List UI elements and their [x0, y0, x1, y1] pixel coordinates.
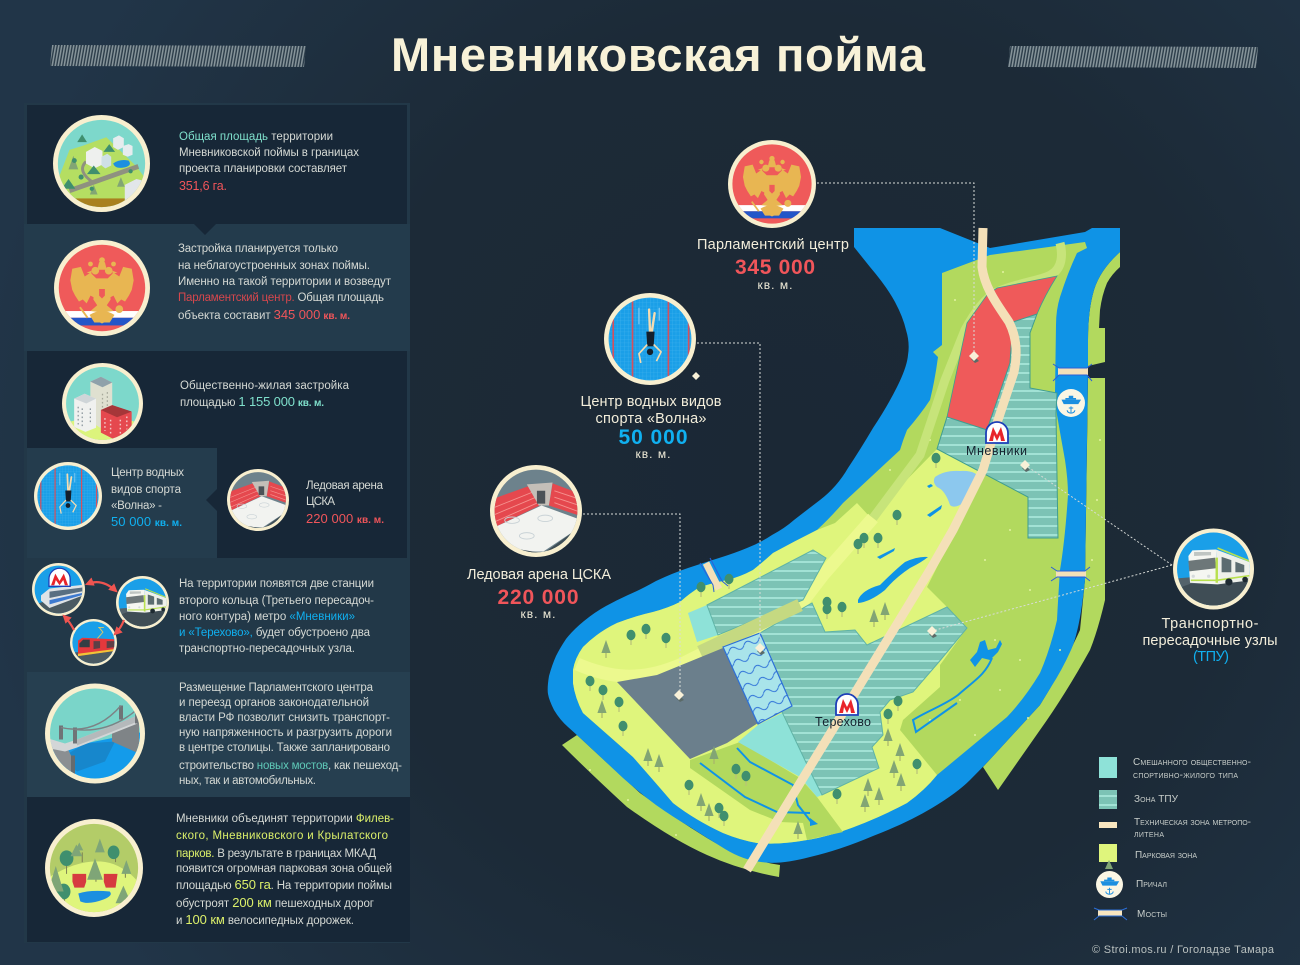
legend: pier	[1096, 871, 1167, 898]
callout: parliament center: 345 000	[735, 256, 815, 279]
east bank south strip	[983, 378, 1105, 790]
decorative hatch bar right	[1008, 46, 1258, 68]
callout: transport hubs	[1142, 528, 1278, 665]
panel: mixed-use development: Общественно-жилая застройка	[180, 380, 350, 392]
legend: bridges	[1094, 908, 1167, 920]
outer southwest bank	[562, 735, 780, 877]
panel: CSKA ice arena	[206, 448, 407, 558]
bridge south	[1051, 567, 1090, 581]
panel: total area: проекта планировки составляет	[179, 163, 348, 175]
panel: water sports center: «Волна» -	[111, 500, 162, 512]
callout: ice arena	[467, 465, 611, 621]
callout: water sports center: 50 000	[618, 426, 688, 449]
bridge north	[1053, 364, 1092, 381]
callout: water sports center: спорта «Волна»	[596, 411, 706, 427]
panel: parliament center: Застройка планируется только	[178, 243, 338, 255]
boulevard dark path	[873, 243, 1061, 518]
panel: parks: площадью 650 га. На территории поймы	[176, 877, 392, 892]
panel: parliament center: объекта составит 345 000 кв. м.	[178, 307, 350, 322]
callout: ice arena: Ледовая арена ЦСКА	[467, 567, 611, 583]
panel: mixed-use development	[27, 351, 407, 448]
panel: metro and transport hubs: и «Терехово», будет обустроено два	[179, 627, 371, 639]
panel: parks: обустроят 200 км пешеходных дорог	[176, 895, 374, 910]
panel: total area: Общая площадь территории	[179, 131, 333, 143]
panel: metro and transport hubs: транспортно-пересадочных узла.	[179, 643, 355, 655]
legend: TPU	[1099, 790, 1179, 809]
callout: parliament center: кв. м.	[758, 278, 792, 292]
leader lines	[583, 183, 1172, 695]
boulevard crossing TPU	[700, 605, 800, 652]
legend: TPU: Зона ТПУ	[1134, 794, 1179, 805]
light park zone	[573, 449, 985, 844]
panel: facts sidebar	[24, 103, 410, 943]
panel: metro and transport hubs	[32, 563, 374, 666]
panel: parliament center	[24, 224, 410, 351]
river	[548, 228, 1120, 863]
panel: new bridges: и переезд органов законодательной	[179, 697, 369, 709]
panel: parliament center: Парламентский центр. Общая площадь	[178, 292, 384, 304]
park tree-line dots	[589, 271, 1101, 836]
panel: metro and transport hubs: ного контура) метро «Мневники»	[179, 611, 355, 623]
TPU zone upper	[707, 550, 826, 635]
panel: water sports center: 50 000 кв. м.	[111, 514, 182, 529]
panel: parks: парков. В результате в границах МКАД	[176, 848, 376, 860]
legend: mixed-use	[1099, 757, 1251, 781]
bridge southwest	[700, 558, 728, 592]
darker park piece south	[690, 742, 843, 840]
zone: ice arena plot	[617, 648, 758, 759]
panel: parliament center: на неблагоустроенных зонах поймы.	[178, 260, 370, 272]
zone: water sports plot	[723, 633, 792, 724]
panel: water sports center: Центр водных	[111, 467, 184, 479]
callout: water sports center: кв. м.	[636, 447, 670, 461]
mixed-use zone upper	[688, 605, 718, 642]
callout: ice arena: 220 000	[498, 586, 578, 609]
panel: parks: появится огромная парковая зона общей	[176, 863, 392, 875]
decorative hatch bar left	[50, 45, 306, 67]
leader markers	[674, 351, 1030, 702]
legend: park: Парковая зона	[1135, 850, 1197, 861]
panel: total area: Мневниковской поймы в границах	[179, 147, 359, 159]
callout: transport hubs: Транспортно-	[1162, 616, 1259, 632]
metro station Terekhovo: Терехово	[815, 715, 871, 729]
trees	[586, 453, 940, 839]
panel: new bridges: ную напряженность и разгрузить дороги	[179, 727, 392, 739]
callout: water sports center: Центр водных видов	[580, 394, 722, 410]
callout: transport hubs: (ТПУ)	[1193, 649, 1229, 665]
callout: transport hubs: пересадочные узлы	[1142, 633, 1278, 649]
panel: new bridges: в центре столицы. Также запланировано	[179, 742, 390, 754]
metro station Mnevniki	[966, 422, 1027, 458]
legend: park	[1099, 844, 1197, 869]
water bodies	[700, 484, 1002, 826]
panel: water sports center	[27, 448, 217, 558]
legend: metro technical zone: Техническая зона метропо-	[1134, 817, 1251, 828]
panel: parks: ского, Мневниковского и Крылатского	[176, 830, 388, 842]
panel: CSKA ice arena: ЦСКА	[306, 496, 335, 508]
panel: new bridges	[27, 672, 410, 797]
park zone base	[573, 242, 1087, 844]
mixed-use zone lower	[738, 713, 822, 797]
panel: parks	[27, 797, 410, 942]
panel: water sports center: видов спорта	[111, 484, 182, 496]
legend: bridges: Мосты	[1137, 909, 1167, 920]
legend: pier: Причал	[1136, 879, 1167, 890]
metro road	[747, 228, 1016, 870]
TPU zone north	[937, 314, 1058, 538]
legend: metro technical zone: литена	[1134, 829, 1164, 840]
panel: parliament center: Именно на такой территории и возведут	[178, 276, 392, 288]
icon: pier	[1057, 389, 1085, 417]
map of the floodplain	[548, 228, 1120, 877]
panel: CSKA ice arena: 220 000 кв. м.	[306, 511, 384, 526]
legend: metro technical zone	[1099, 817, 1251, 840]
panel: parks: и 100 км велосипедных дорожек.	[176, 912, 354, 927]
callout: parliament center	[697, 140, 849, 292]
panel: metro and transport hubs: второго кольца (Третьего пересадоч-	[179, 595, 374, 607]
panel: total area	[27, 105, 407, 235]
credit: © Stroi.mos.ru / Гоголадзе Тамара	[1092, 944, 1275, 956]
callout: water sports center	[580, 293, 722, 461]
panel: new bridges: строительство новых мостов, как пешеход-	[179, 760, 402, 772]
TPU zone main	[760, 603, 967, 795]
panel: new bridges: ных, так и автомобильных.	[179, 775, 316, 787]
callout: ice arena: кв. м.	[520, 607, 556, 621]
panel: parks: Мневники объединят территории Филев-	[176, 813, 394, 825]
metro station Mnevniki: Мневники	[966, 444, 1027, 458]
legend	[1094, 757, 1251, 920]
panel: mixed-use development: площадью 1 155 000 кв. м.	[180, 394, 324, 409]
metro station Terekhovo	[815, 694, 871, 729]
east bank north strip	[1088, 252, 1120, 366]
zone: parliament center plot	[947, 276, 1057, 430]
callout: parliament center: Парламентский центр	[697, 237, 849, 253]
panel: total area: 351,6 га.	[179, 179, 227, 193]
legend: mixed-use: Смешанного общественно-	[1133, 757, 1251, 768]
legend: mixed-use: спортивно-жилого типа	[1133, 770, 1238, 781]
title: Мневниковская пойма	[391, 28, 926, 81]
panel: metro and transport hubs: На территории появятся две станции	[179, 578, 374, 590]
panel: CSKA ice arena: Ледовая арена	[306, 480, 384, 492]
lake	[934, 471, 979, 507]
panel: new bridges: власти РФ позволит снизить транспорт-	[179, 712, 390, 724]
boulevard light path	[577, 518, 873, 676]
panel: new bridges: Размещение Парламентского центра	[179, 682, 374, 694]
